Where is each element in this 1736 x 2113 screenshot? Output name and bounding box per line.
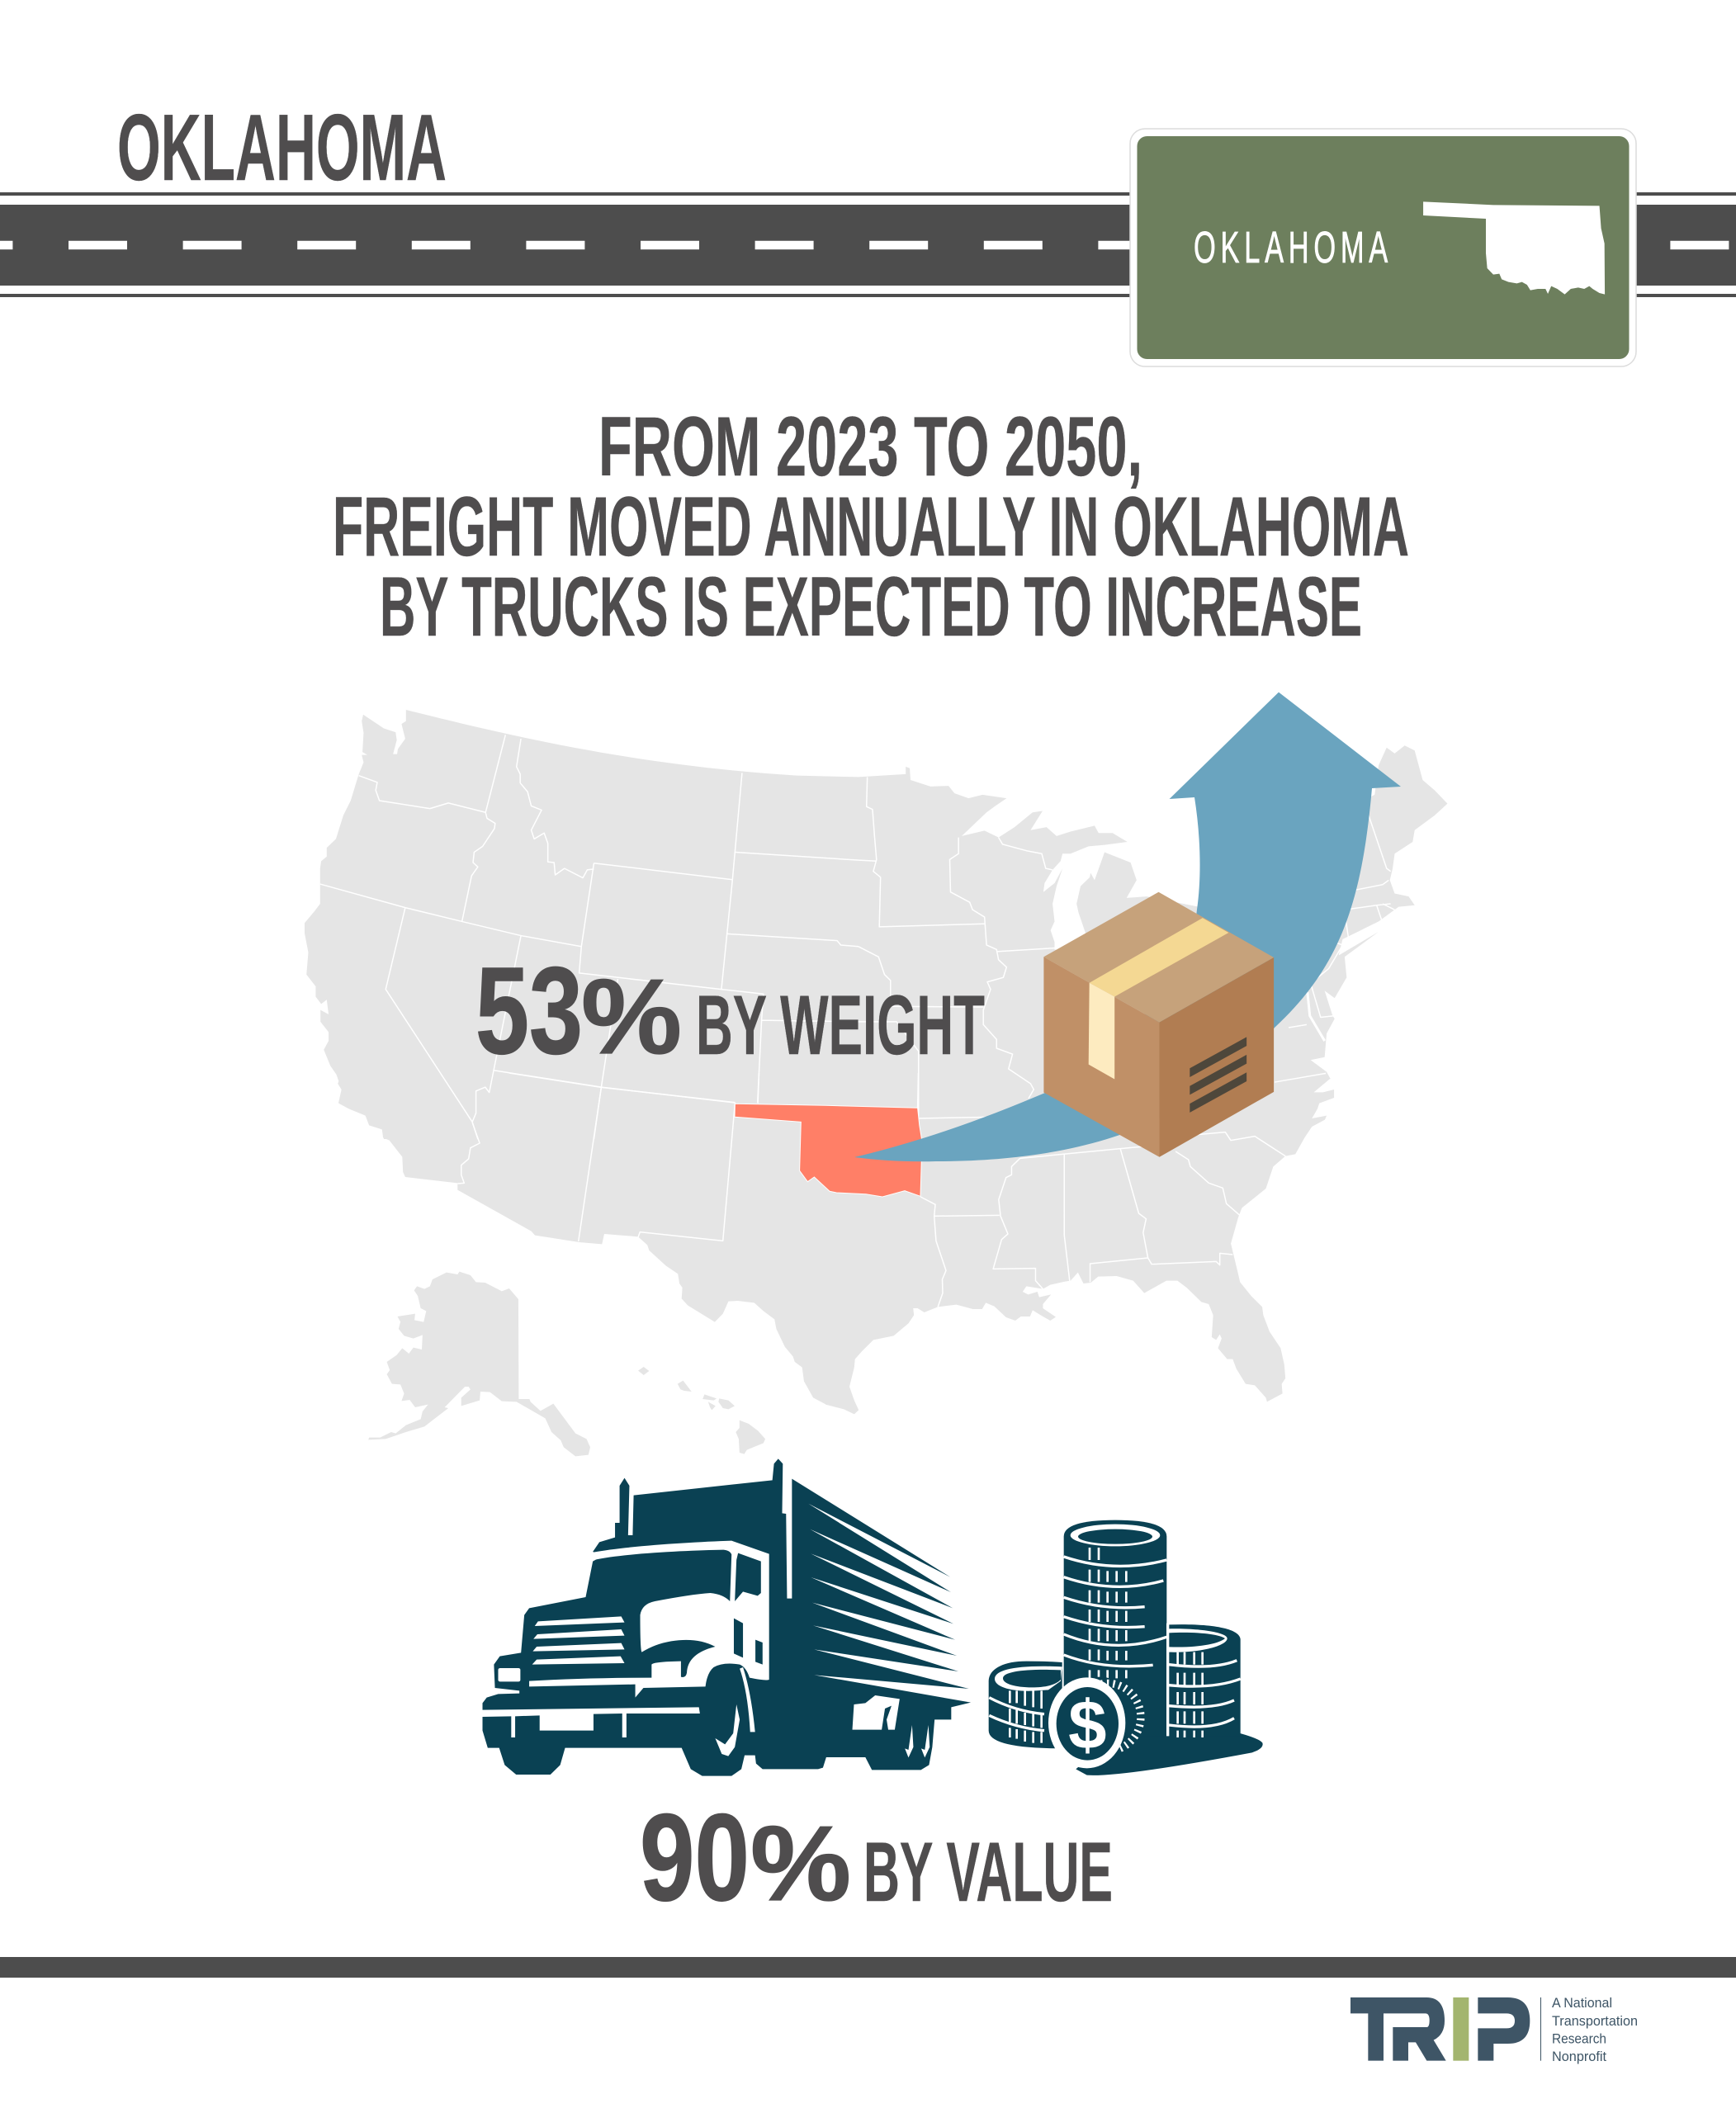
logo tagline: A National	[1552, 1995, 1612, 2011]
icon: coin stacks: $	[1068, 1686, 1107, 1763]
stat: 53% by weight	[475, 941, 985, 1080]
icon: coin stacks	[989, 1520, 1263, 1775]
stat: 90% by value: BY VALUE	[863, 1825, 1113, 1919]
stat: 53% by weight: %	[581, 957, 682, 1076]
sign label: OKLAHOMA	[1194, 223, 1393, 272]
Oklahoma highlight	[735, 1104, 922, 1197]
logo tagline: Transportation	[1552, 2013, 1638, 2029]
logo tagline	[1552, 1995, 1638, 2064]
page title: OKLAHOMA	[117, 96, 447, 201]
icon: truck	[483, 1458, 971, 1776]
US map	[305, 710, 1447, 1456]
footer bar	[0, 1957, 1736, 1978]
heading	[333, 399, 1409, 654]
icon: cardboard box	[1043, 892, 1274, 1157]
stat: 53% by weight: BY WEIGHT	[696, 978, 985, 1072]
TRIP logo	[1350, 1995, 1638, 2064]
stat: 90% by value	[640, 1788, 1113, 1926]
arrow	[854, 693, 1401, 1161]
logo tagline: Nonprofit	[1552, 2049, 1606, 2064]
stat: 90% by value: %	[750, 1804, 851, 1923]
stat: 53% by weight: 53	[475, 941, 583, 1080]
road band	[0, 192, 1736, 297]
logo tagline: Research	[1552, 2030, 1606, 2047]
icon: Oklahoma silhouette	[1423, 201, 1605, 295]
heading: FROM 2023 TO 2050,	[598, 399, 1142, 494]
highway sign	[1130, 129, 1636, 366]
stat: 90% by value: 90	[640, 1788, 750, 1926]
